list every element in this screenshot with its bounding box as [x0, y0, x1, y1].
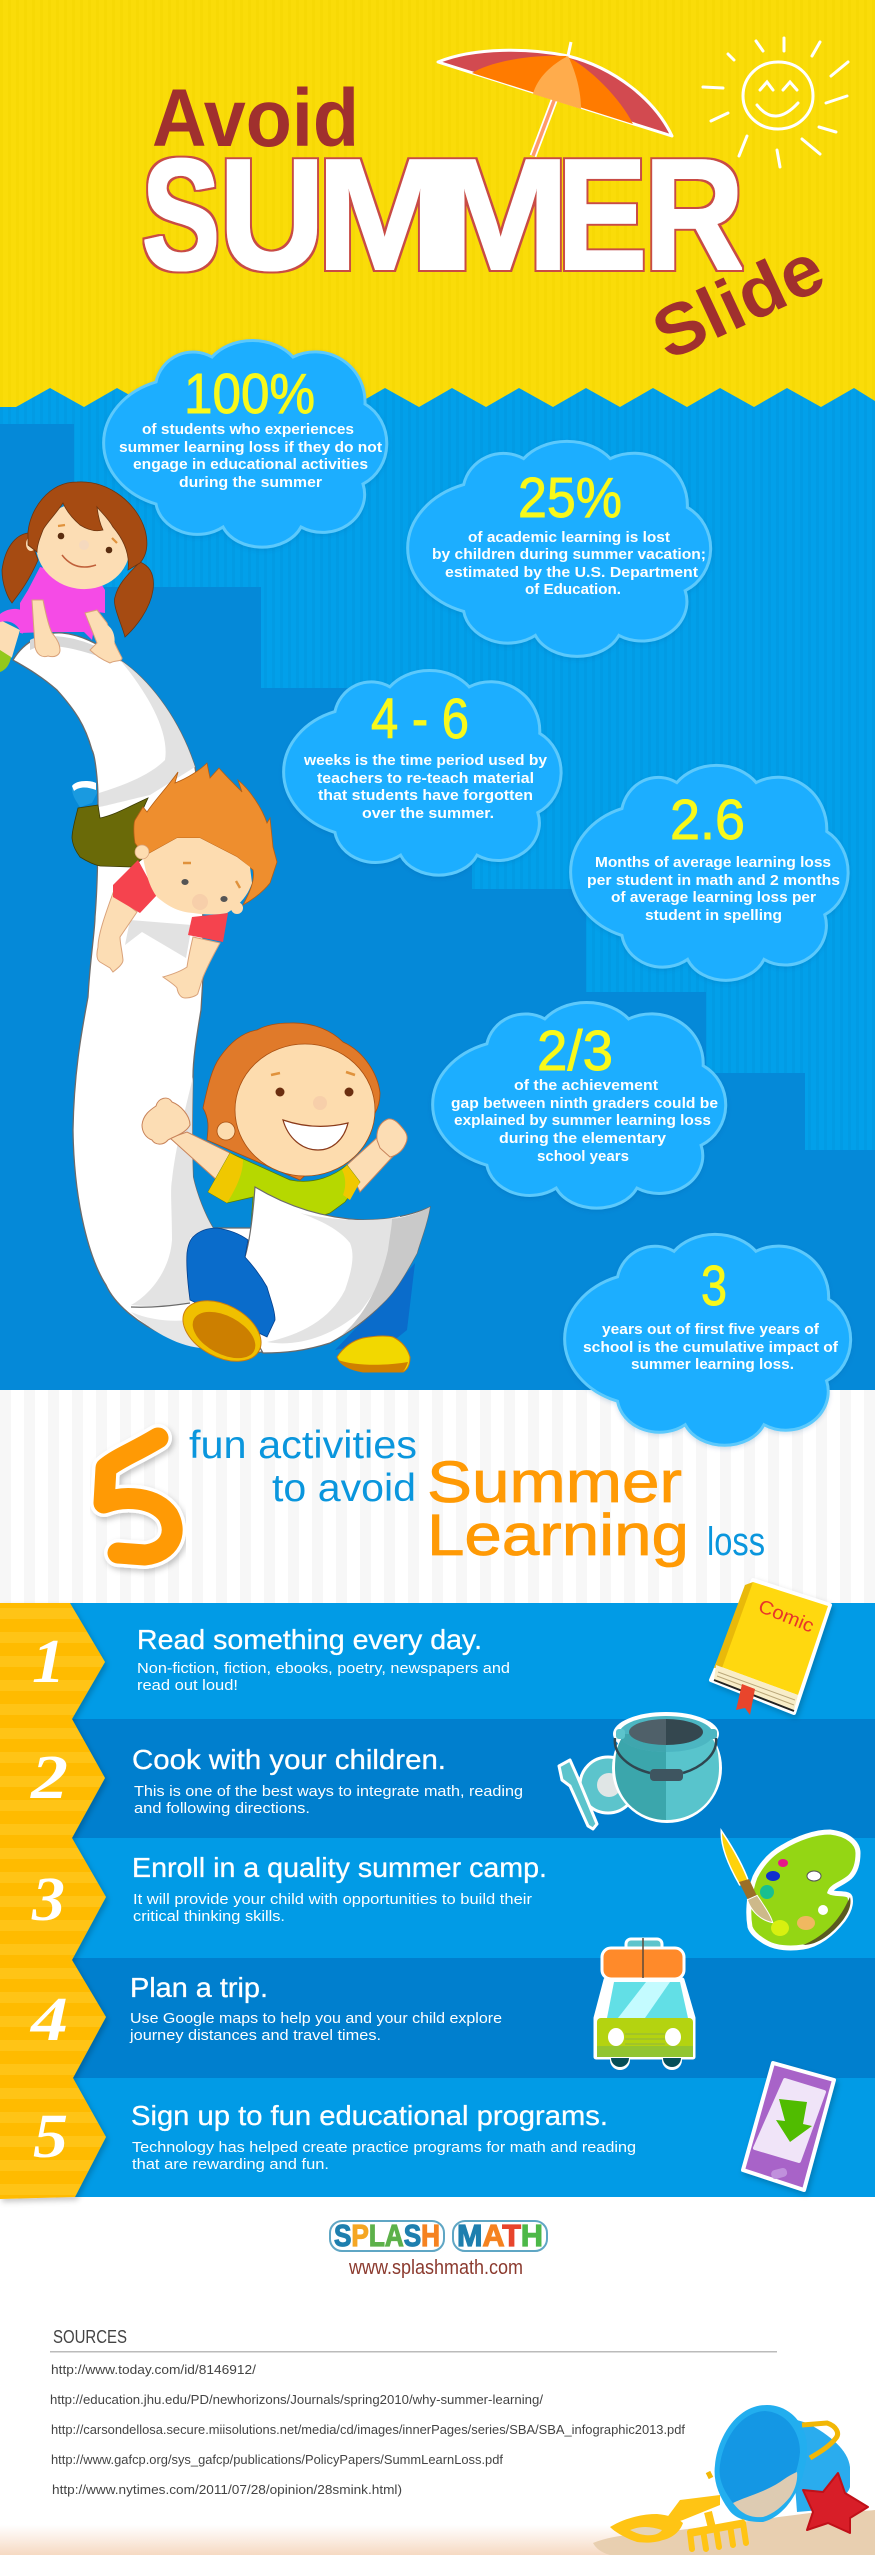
girl leg cuff: [0, 609, 33, 634]
stat cloud: 2.6: of average learning loss per: [611, 889, 816, 906]
row 3: camp: 3: [31, 1866, 65, 1934]
row 1: read: read out loud!: [137, 1677, 238, 1694]
title word: SUMMER: E: [557, 127, 647, 303]
title: [142, 73, 836, 376]
row 2: cook: and following directions.: [134, 1800, 310, 1817]
row 4: trip: Plan a trip.: [130, 1972, 268, 2003]
character: climbing boy: [72, 763, 277, 998]
plate: [580, 1757, 636, 1813]
boy ear: [135, 845, 149, 859]
heading text: Summer: Summer: [427, 1450, 682, 1515]
icon: comic book: [711, 1580, 830, 1715]
background: darker staircase: [0, 424, 875, 1390]
row 5: programs: Technology has helped create practice programs for math and reading: [132, 2139, 636, 2156]
stat cloud: 2/3: [433, 1002, 726, 1208]
right arm: [347, 1135, 397, 1192]
row 3: camp: Enroll in a quality summer camp.: [132, 1852, 547, 1883]
row 3: camp: critical thinking skills.: [133, 1908, 285, 1925]
character: cheering boy: [142, 1023, 415, 1372]
back shoe: [337, 1336, 410, 1372]
face: [235, 1044, 375, 1176]
stat cloud: 3: years out of first five years of: [602, 1321, 820, 1338]
icon: cooking pot with plate and fork: [559, 1712, 722, 1829]
stat cloud: 100%: 100%: [184, 362, 315, 426]
shovel: [610, 2514, 683, 2543]
boy nose: [192, 894, 208, 910]
source links: http://www.today.com/id/8146912/: [51, 2362, 256, 2377]
girl eyes: [58, 533, 64, 539]
girl hair: [28, 482, 147, 570]
nose: [313, 1096, 327, 1110]
girl far leg: [0, 620, 20, 667]
row 5: programs: Sign up to fun educational programs.: [131, 2100, 608, 2131]
stat cloud: 2.6: Months of average learning loss: [595, 854, 831, 871]
stat cloud: 100%: engage in educational activities: [133, 456, 368, 473]
title word: SUMMER: M: [316, 127, 453, 303]
title word: Slide: Slide: [641, 228, 836, 376]
stat cloud: 100%: [104, 340, 387, 547]
row 1: read: [32, 1624, 510, 1696]
stat cloud: 25%: of Education.: [525, 581, 621, 598]
hair: [203, 1023, 380, 1180]
source links: [50, 2362, 685, 2497]
stat cloud: 100%: during the summer: [179, 474, 322, 491]
row 3: camp: It will provide your child with opportunities to build their: [133, 1891, 532, 1908]
rake: [690, 2512, 745, 2533]
stat cloud: 4-6: that students have forgotten: [318, 787, 533, 804]
icon: paint palette: [722, 1832, 858, 1948]
stat cloud: 3: 3: [701, 1254, 727, 1318]
curl light shade: [267, 1213, 400, 1343]
eyes: [276, 1088, 284, 1096]
row 4: trip: journey distances and travel times.: [129, 2027, 381, 2044]
icon: comic book: Comic: [755, 1596, 817, 1637]
girl smile: [62, 555, 96, 567]
girl pigtail left: [2, 533, 38, 603]
pot body: [615, 1738, 666, 1820]
paper shading mid: [125, 920, 192, 958]
left arm: [170, 1132, 230, 1183]
girl nose: [79, 540, 89, 550]
stat cloud: 3: [565, 1234, 851, 1445]
row 3: camp: [31, 1852, 547, 1934]
paper shading lower band: [131, 1077, 213, 1306]
stat cloud: 25%: by children during summer vacation;: [432, 546, 706, 563]
stat cloud: 4-6: over the summer.: [362, 805, 494, 822]
logo: Splash Math: SPLASH: [334, 2218, 440, 2253]
source links: http://carsondellosa.secure.miisolutions.net/media/cd/images/innerPages/series/SBA/SBA_infographic2013.pdf: [51, 2422, 685, 2437]
stat cloud: 4-6: [284, 670, 561, 875]
row 2: cook: 2: [30, 1744, 68, 1812]
girl face: [30, 497, 136, 595]
girl shirt: [20, 567, 105, 640]
row 2: cook: [30, 1744, 523, 1817]
row 4: trip: Use Google maps to help you and your child explore: [130, 2010, 502, 2027]
stat cloud: 4-6: teachers to re-teach material: [317, 770, 534, 787]
character: girl: [0, 482, 153, 672]
back leg: [335, 1263, 415, 1350]
stat cloud: 4-6: 4 - 6: [371, 687, 469, 751]
boy left sleeve: [113, 860, 157, 913]
stat cloud: 2.6: per student in math and 2 months: [587, 872, 840, 889]
bucket body: [790, 2418, 850, 2512]
smile: [283, 1120, 348, 1150]
background: blue stats panel with zigzag edge: [0, 388, 875, 1390]
starfish: [803, 2473, 868, 2533]
sand pile: [593, 2510, 875, 2555]
girl pigtail right: [114, 562, 153, 637]
sleeves: [208, 1153, 243, 1203]
girl sock: [0, 650, 11, 672]
title word: SUMMER: R: [644, 127, 744, 303]
stat cloud: 25%: 25%: [518, 466, 622, 530]
source links: http://www.gafcp.org/sys_gafcp/publications/PolicyPapers/SummLearnLoss.pdf: [51, 2452, 503, 2467]
background: white activities panel: [0, 1390, 875, 1603]
title word: SUMMER: U: [219, 127, 325, 303]
stat cloud: 2/3: gap between ninth graders could be: [451, 1095, 718, 1112]
icon: beach umbrella: [438, 42, 672, 156]
left fist: [142, 1098, 190, 1144]
pot handle: [615, 1738, 716, 1773]
front shoe: [173, 1288, 271, 1374]
ear: [217, 1122, 235, 1140]
stat cloud: 2/3: 2/3: [537, 1019, 613, 1083]
row 5: programs: 5: [33, 2103, 68, 2171]
stat cloud: 25%: [408, 441, 711, 656]
stat cloud: 2.6: [571, 765, 848, 980]
icon: tablet download: [743, 2063, 834, 2190]
row 4: trip: [30, 1972, 502, 2054]
stat cloud: 2/3: during the elementary: [499, 1130, 667, 1147]
front leg and shoe: [173, 1228, 275, 1374]
fork: [559, 1760, 597, 1829]
row 5: programs: that are rewarding and fun.: [132, 2156, 329, 2173]
boy right sleeve: [188, 913, 228, 942]
stat cloud: 2.6: student in spelling: [645, 907, 782, 924]
boy face: [143, 838, 252, 914]
stat cloud: 25%: of academic learning is lost: [468, 529, 670, 546]
row 4: trip: 4: [30, 1986, 68, 2054]
boy left arm: [97, 893, 137, 972]
logo: Splash Math: MATH: [457, 2218, 543, 2253]
title word: Avoid: Avoid: [152, 73, 359, 164]
activities heading: [104, 1424, 765, 1568]
bucket opening: [715, 2405, 807, 2522]
boy right arm: [163, 937, 220, 998]
girl arm left: [32, 600, 60, 657]
brush: [722, 1833, 748, 1884]
stat cloud: 4-6: weeks is the time period used by: [303, 752, 548, 769]
boy hair: [134, 763, 277, 905]
bucket handle: [802, 2423, 838, 2458]
row 1: read: Non-fiction, fiction, ebooks, poetry, newspapers and: [137, 1660, 510, 1677]
pot outline: [613, 1712, 719, 1756]
icon: sun doodle: [703, 38, 848, 167]
row 1: read: 1: [32, 1628, 65, 1696]
website url: www.splashmath.com: [348, 2257, 523, 2279]
big number 5: [104, 1438, 172, 1555]
sources heading: SOURCES: [53, 2327, 127, 2347]
row 1: read: Read something every day.: [137, 1624, 482, 1655]
row 2: cook: This is one of the best ways to integrate math, reading: [134, 1783, 523, 1800]
girl arm right: [85, 610, 122, 663]
row 2: cook: Cook with your children.: [132, 1744, 446, 1775]
row 5: programs: [33, 2100, 636, 2173]
beach toys: bucket, star, shovel, rake: [593, 2405, 875, 2555]
heading text: loss: loss: [707, 1520, 765, 1564]
pot rim: [619, 1716, 713, 1752]
stat cloud: 25%: estimated by the U.S. Department: [445, 564, 698, 581]
boy eyes: [181, 879, 189, 885]
girl ear: [26, 537, 36, 551]
heading text: fun activities: fun activities: [189, 1424, 417, 1467]
heading text: Learning: Learning: [427, 1503, 689, 1568]
stat cloud: 2/3: school years: [537, 1148, 629, 1165]
source links: http://education.jhu.edu/PD/newhorizons/Journals/spring2010/why-summer-learning/: [50, 2392, 543, 2407]
source links: http://www.nytimes.com/2011/07/28/opinion/28smink.html): [52, 2482, 402, 2497]
title word: SUMMER: M: [431, 127, 570, 303]
stat cloud: 100%: summer learning loss if they do not: [119, 439, 382, 456]
heading text: to avoid: to avoid: [272, 1467, 416, 1510]
stat cloud: 2.6: 2.6: [670, 788, 745, 852]
stat cloud: 2/3: of the achievement: [514, 1077, 658, 1094]
title word: SUMMER: S: [142, 127, 220, 303]
title word: SUMMER: [142, 127, 744, 303]
stat cloud: 2/3: explained by summer learning loss: [454, 1112, 711, 1129]
beach sand gradient: [0, 2525, 875, 2555]
stat cloud: 3: summer learning loss.: [631, 1356, 794, 1373]
curl dark shade: [342, 1207, 430, 1335]
activity rows backgrounds: [0, 1603, 875, 2197]
boy trousers: [72, 798, 150, 867]
logo: Splash Math: [330, 2218, 547, 2253]
stat cloud: 3: school is the cumulative impact of: [583, 1339, 839, 1356]
boy shoe: [72, 781, 97, 807]
background: yellow header: [0, 0, 875, 420]
sources: [50, 2327, 777, 2497]
paper shading top: [30, 636, 120, 660]
sand in bucket: [733, 2472, 797, 2517]
paper shading by right edge: [99, 660, 195, 807]
paper curl over boy: [245, 1187, 430, 1353]
shirt: [208, 1153, 360, 1240]
stat cloud: 100%: of students who experiences: [142, 421, 354, 438]
right fist: [377, 1119, 407, 1157]
pot opening: [629, 1719, 666, 1745]
orange chevron strip: [0, 1603, 106, 2199]
icon: camper van: [596, 1938, 693, 2070]
paper slide: [13, 633, 262, 1353]
